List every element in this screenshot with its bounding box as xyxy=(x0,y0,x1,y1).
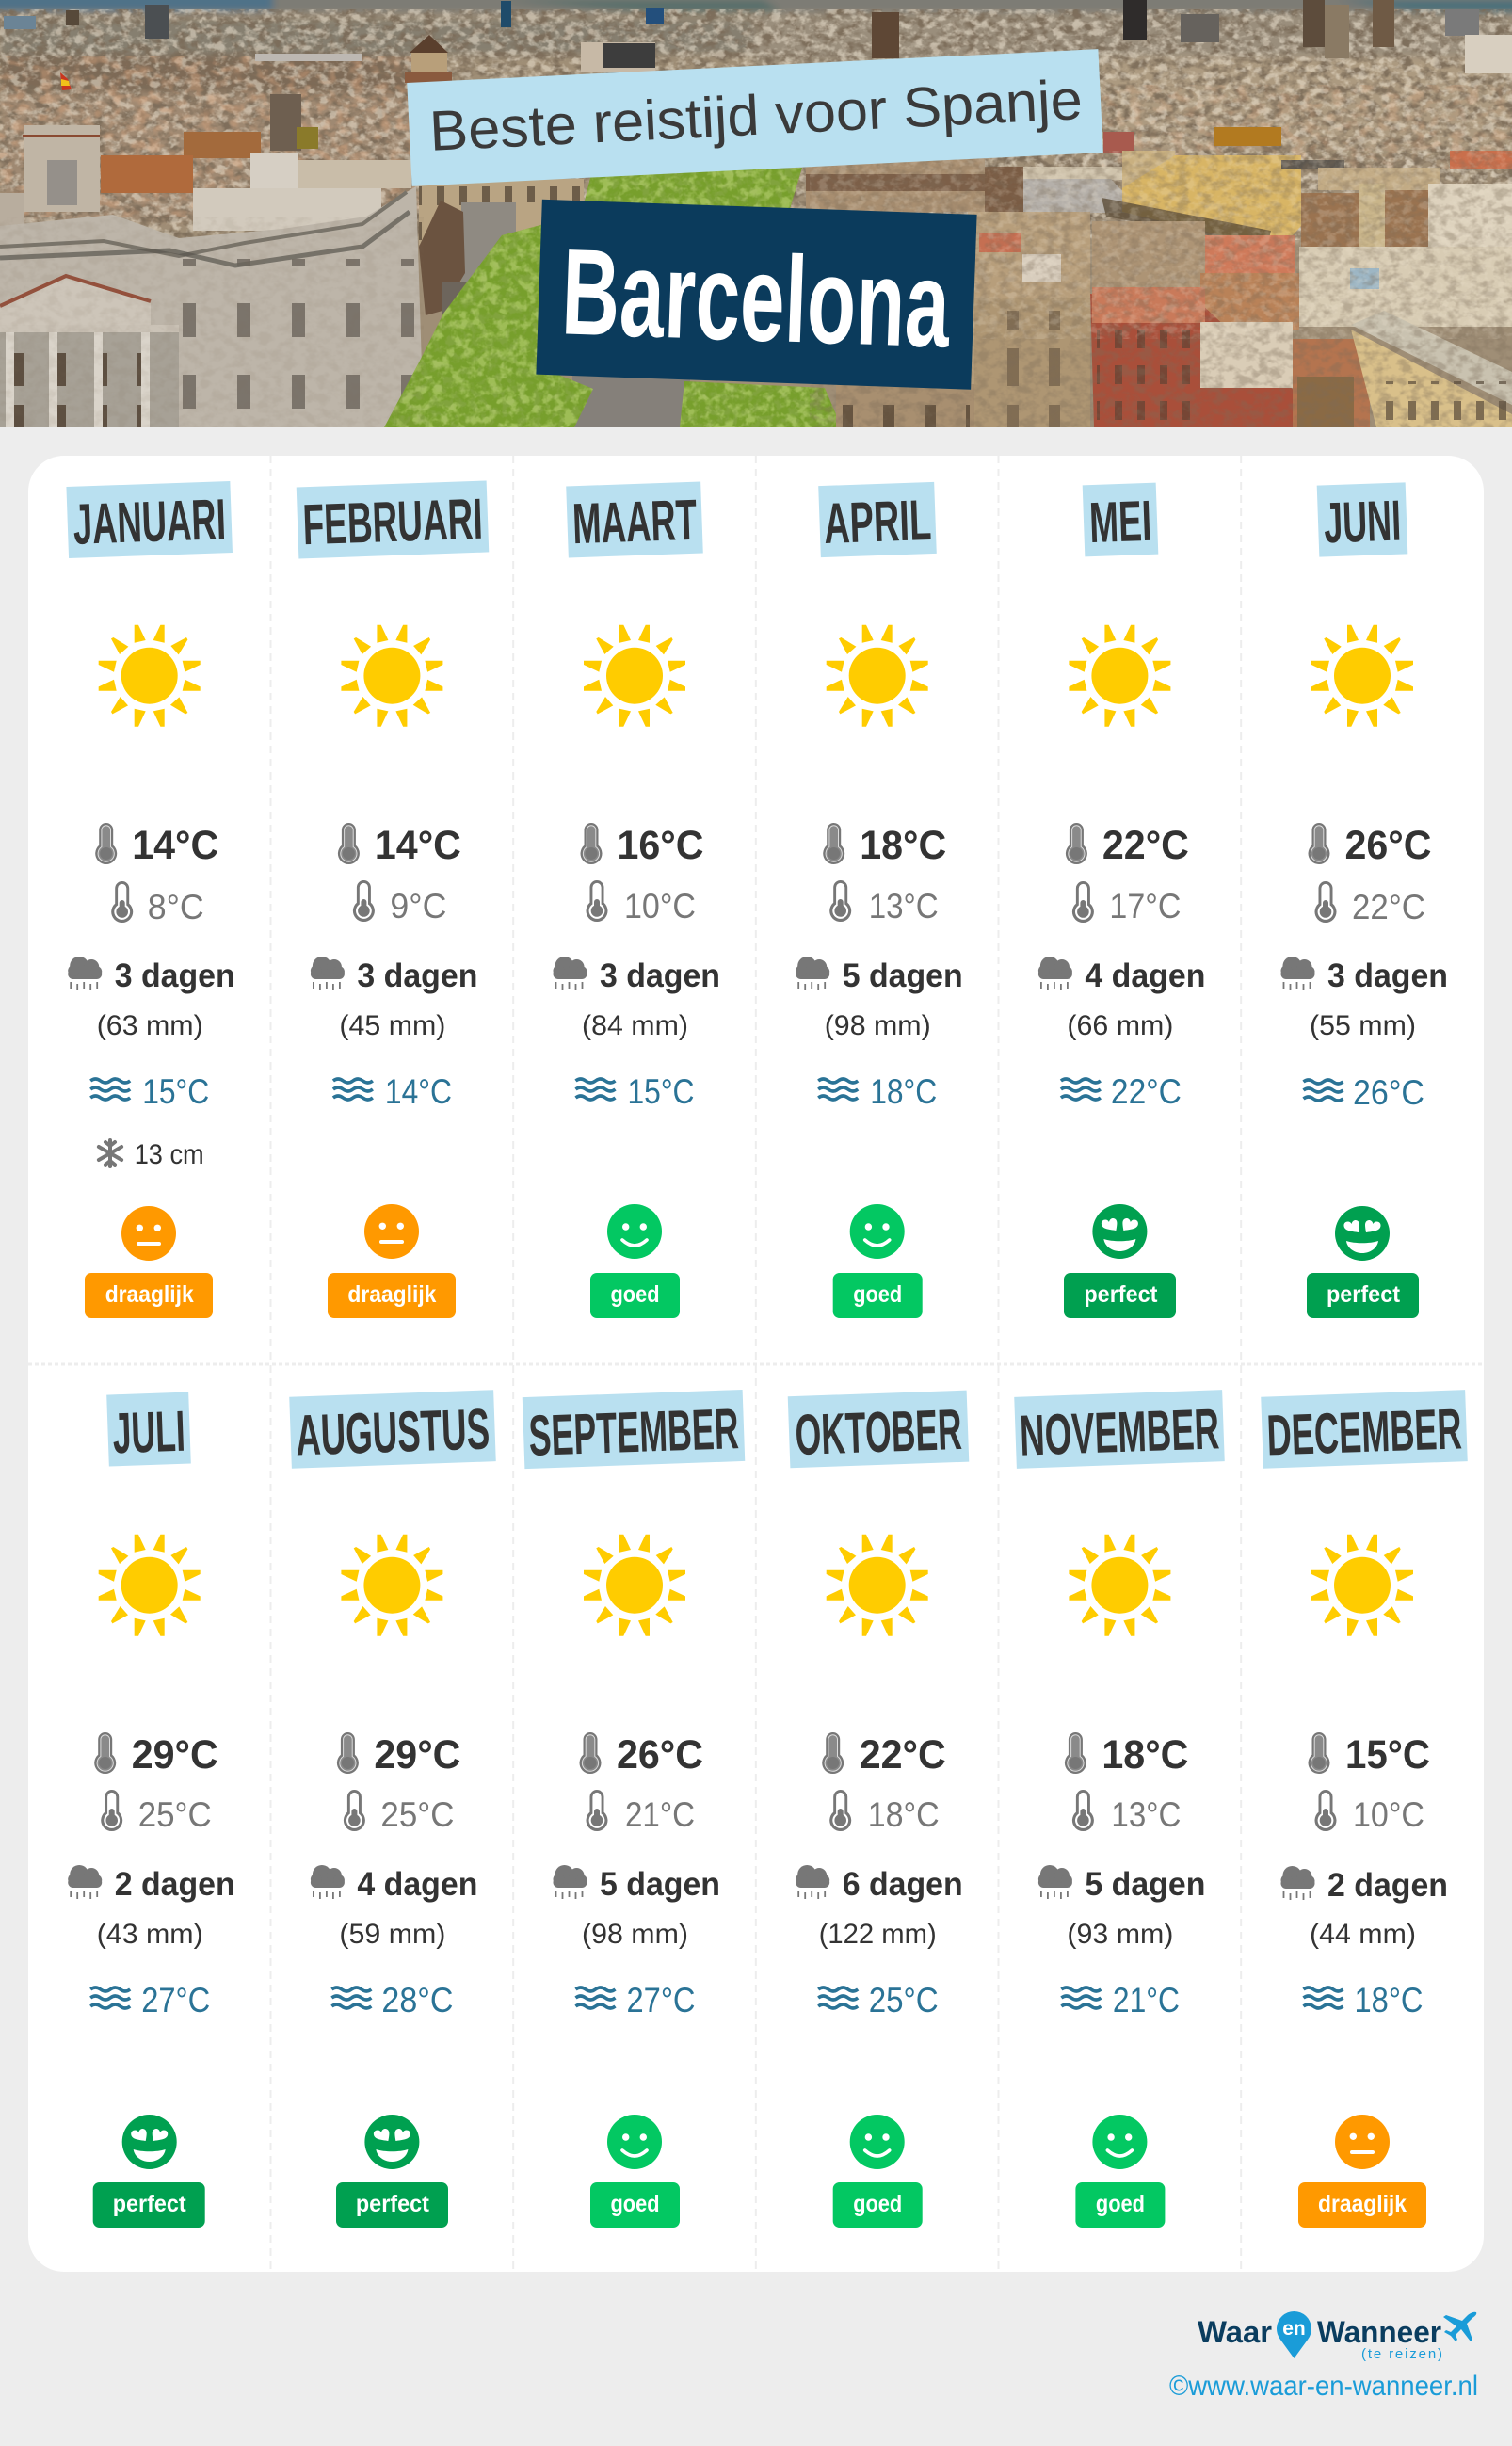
icon: sun xyxy=(1311,1535,1413,1636)
max temperature: 18°C xyxy=(860,823,946,868)
icon: sea water xyxy=(576,1079,616,1100)
rating face xyxy=(364,2115,419,2169)
rating badge: goed xyxy=(853,2191,902,2217)
icon: sun xyxy=(584,1535,685,1636)
rating face xyxy=(607,1204,662,1259)
rating face xyxy=(122,2115,177,2169)
rating face xyxy=(1335,1206,1390,1261)
rain days: 3 dagen xyxy=(357,957,477,994)
rating face xyxy=(1092,1204,1147,1259)
sea temperature: 22°C xyxy=(1111,1072,1182,1111)
rainfall: (44 mm) xyxy=(1310,1919,1416,1950)
icon: sun xyxy=(341,625,442,727)
rating face xyxy=(364,1204,419,1259)
rainfall: (55 mm) xyxy=(1310,1010,1416,1041)
rain days: 4 dagen xyxy=(357,1866,477,1903)
icon: max temperature xyxy=(580,1732,601,1774)
icon: min temperature xyxy=(586,1790,608,1831)
rating face xyxy=(850,1204,905,1259)
month: augustus xyxy=(289,1390,496,2228)
rainfall: (43 mm) xyxy=(97,1919,203,1950)
rain days: 4 dagen xyxy=(1085,957,1205,994)
max temperature: 22°C xyxy=(1102,823,1189,868)
month label: JUNI xyxy=(1323,489,1402,555)
month label: FEBRUARI xyxy=(301,487,484,556)
sea temperature: 26°C xyxy=(1353,1073,1424,1112)
icon: sun xyxy=(99,625,201,727)
rating badge: draaglijk xyxy=(105,1281,194,1308)
month: oktober xyxy=(788,1391,969,2228)
month: maart xyxy=(554,482,720,1318)
rating badge xyxy=(833,2182,923,2228)
max temperature: 18°C xyxy=(1102,1732,1188,1778)
rating badge: perfect xyxy=(113,2191,186,2217)
rating face xyxy=(607,2115,662,2169)
icon: sea water xyxy=(1303,1080,1343,1101)
rainfall: (66 mm) xyxy=(1067,1010,1173,1041)
rating badge: goed xyxy=(610,2191,659,2217)
rating badge xyxy=(1075,2182,1165,2228)
icon: sun xyxy=(584,625,685,727)
month label: NOVEMBER xyxy=(1019,1396,1220,1468)
max temperature: 15°C xyxy=(1345,1732,1430,1778)
min temperature: 13°C xyxy=(1111,1795,1181,1834)
left building xyxy=(0,125,424,427)
icon: sea water xyxy=(1061,1079,1101,1100)
max temperature: 26°C xyxy=(1344,823,1431,868)
icon: min temperature xyxy=(353,880,375,922)
rainfall: (59 mm) xyxy=(339,1919,445,1950)
rating face xyxy=(1335,2115,1390,2169)
icon: max temperature xyxy=(1309,823,1329,864)
sea temperature: 25°C xyxy=(869,1981,939,2020)
icon: rain xyxy=(1280,957,1314,990)
logo word: Wanneer: Wanneer xyxy=(1317,2315,1441,2349)
icon: map pin with en xyxy=(1277,2311,1311,2358)
icon: rain xyxy=(796,957,829,990)
month label: MEI xyxy=(1088,489,1152,555)
month label xyxy=(1083,483,1158,556)
icon: sea water xyxy=(90,1079,130,1100)
icon: rain xyxy=(554,957,587,990)
month label xyxy=(106,1392,191,1467)
icon: min temperature xyxy=(344,1790,365,1831)
rainfall: (45 mm) xyxy=(339,1010,445,1041)
max temperature: 29°C xyxy=(374,1732,460,1778)
max temperature: 29°C xyxy=(132,1732,218,1778)
min temperature: 25°C xyxy=(138,1795,212,1834)
month label xyxy=(818,482,937,557)
icon: sun xyxy=(1311,625,1413,727)
rating face xyxy=(121,1206,176,1261)
rating face xyxy=(850,2115,905,2169)
sea temperature: 14°C xyxy=(385,1072,452,1111)
logo: Waar en Wanneer xyxy=(1198,2311,1476,2362)
panel: climate calendar xyxy=(28,456,1484,2272)
rating badge: perfect xyxy=(356,2191,430,2217)
icon: rain xyxy=(1038,1865,1072,1899)
icon: min temperature xyxy=(829,1790,851,1831)
icon: airplane xyxy=(1443,2312,1476,2341)
min temperature: 17°C xyxy=(1109,887,1181,925)
rain days: 5 dagen xyxy=(843,957,963,994)
rating badge: goed xyxy=(610,1281,659,1308)
icon: rain xyxy=(311,957,345,990)
icon: min temperature xyxy=(101,1790,122,1831)
city banner: Barcelona xyxy=(536,200,977,390)
icon: sun xyxy=(827,1535,928,1636)
month label: AUGUSTUS xyxy=(295,1396,491,1468)
rain days: 5 dagen xyxy=(1085,1866,1205,1903)
icon: rain xyxy=(796,1865,829,1899)
icon: max temperature xyxy=(95,823,117,864)
month label xyxy=(289,1390,496,1469)
max temperature: 22°C xyxy=(860,1732,946,1778)
icon: max temperature xyxy=(338,823,360,864)
icon: min temperature xyxy=(111,881,133,923)
min temperature: 9°C xyxy=(390,887,446,925)
rating badge: goed xyxy=(853,1281,902,1308)
icon: sea water xyxy=(818,1079,858,1100)
rating badge xyxy=(328,1273,456,1318)
icon: min temperature xyxy=(1072,881,1094,923)
rating badge xyxy=(336,2182,448,2228)
icon: min temperature xyxy=(1314,881,1337,923)
rainfall: (98 mm) xyxy=(582,1919,688,1950)
icon: max temperature xyxy=(1065,1732,1086,1774)
min temperature: 13°C xyxy=(869,887,939,925)
icon: max temperature xyxy=(823,823,844,864)
icon: sun xyxy=(341,1535,442,1636)
icon: rain xyxy=(1280,1866,1314,1900)
rating badge xyxy=(93,2182,205,2228)
icon: sea water xyxy=(818,1987,858,2008)
month label xyxy=(566,482,703,557)
sea temperature: 28°C xyxy=(381,1981,453,2020)
month: juni xyxy=(1280,482,1448,1318)
month label xyxy=(66,481,233,558)
month label: JANUARI xyxy=(72,487,227,556)
icon: sun xyxy=(99,1535,201,1636)
icon: min temperature xyxy=(586,880,608,922)
icon: min temperature xyxy=(1314,1790,1337,1831)
icon: max temperature xyxy=(94,1732,116,1774)
sea temperature: 18°C xyxy=(1354,1981,1424,2020)
month: december xyxy=(1261,1390,1468,2228)
centre buildings xyxy=(419,179,690,427)
skyline towers and landmarks xyxy=(4,0,1512,151)
max temperature: 16°C xyxy=(618,823,704,868)
month label: APRIL xyxy=(823,488,932,555)
month label xyxy=(1014,1390,1225,1469)
month: januari xyxy=(66,481,235,1318)
min temperature: 18°C xyxy=(868,1795,940,1834)
icon: sea water xyxy=(90,1987,130,2008)
month: september xyxy=(523,1390,745,2228)
month: november xyxy=(1014,1390,1225,2228)
rating badge xyxy=(1307,1273,1419,1318)
icon: rain xyxy=(1038,957,1072,990)
min temperature: 22°C xyxy=(1352,888,1425,926)
icon: sun xyxy=(1069,1535,1170,1636)
snowfall: 13 cm xyxy=(135,1139,204,1170)
icon: rain xyxy=(68,957,102,990)
rain days: 5 dagen xyxy=(600,1866,720,1903)
month label: MAART xyxy=(571,488,698,555)
month: april xyxy=(796,482,963,1318)
rating badge xyxy=(590,1273,680,1318)
month label xyxy=(523,1390,745,1469)
month: februari xyxy=(297,480,489,1318)
rain days: 2 dagen xyxy=(1327,1867,1448,1904)
logo word: Waar: Waar xyxy=(1198,2315,1272,2349)
icon: min temperature xyxy=(829,880,851,922)
icon: sun xyxy=(1069,625,1170,727)
rating badge: draaglijk xyxy=(1318,2191,1407,2217)
month label: SEPTEMBER xyxy=(527,1396,740,1468)
icon: max temperature xyxy=(1066,823,1087,864)
sea temperature: 18°C xyxy=(870,1072,937,1111)
min temperature: 10°C xyxy=(624,887,696,925)
avenue trees xyxy=(384,168,836,427)
month label xyxy=(297,480,489,558)
max temperature: 14°C xyxy=(375,823,461,868)
icon: sea water xyxy=(1303,1987,1343,2008)
min temperature: 25°C xyxy=(380,1795,454,1834)
icon: sea water xyxy=(1061,1987,1101,2008)
rating badge: goed xyxy=(1096,2191,1145,2217)
sea temperature: 27°C xyxy=(627,1981,695,2020)
icon: sea water xyxy=(331,1987,371,2008)
month: mei xyxy=(1038,483,1205,1318)
rainfall: (122 mm) xyxy=(819,1919,937,1950)
logo tagline: (te reizen) xyxy=(1361,2346,1442,2362)
rating badge xyxy=(590,2182,680,2228)
sea temperature: 15°C xyxy=(627,1072,695,1111)
rating face xyxy=(1092,2115,1147,2169)
icon: max temperature xyxy=(580,823,603,864)
sea temperature: 21°C xyxy=(1113,1981,1180,2020)
rainfall: (93 mm) xyxy=(1067,1919,1173,1950)
month label: OKTOBER xyxy=(794,1397,963,1467)
city banner: Barcelona: Barcelona xyxy=(559,222,953,374)
rating badge: draaglijk xyxy=(347,1281,436,1308)
title banner: Beste reistijd voor Spanje: Beste reistijd voor Spanje xyxy=(428,68,1084,163)
rating badge: perfect xyxy=(1327,1281,1401,1308)
icon: max temperature xyxy=(1309,1732,1329,1774)
icon: rain xyxy=(311,1865,345,1899)
icon: map pin with en: en xyxy=(1282,2318,1306,2340)
website credit: ©www.waar-en-wanneer.nl xyxy=(1169,2371,1478,2402)
min temperature: 8°C xyxy=(148,888,204,926)
month label xyxy=(1317,482,1407,557)
min temperature: 21°C xyxy=(625,1795,695,1834)
rainfall: (84 mm) xyxy=(582,1010,688,1041)
month: juli xyxy=(68,1392,235,2228)
icon: rain xyxy=(554,1865,587,1899)
rain days: 3 dagen xyxy=(115,957,235,994)
rainfall: (63 mm) xyxy=(97,1010,203,1041)
icon: sun xyxy=(827,625,928,727)
rainfall: (98 mm) xyxy=(825,1010,931,1041)
icon: rain xyxy=(68,1865,102,1899)
rain days: 2 dagen xyxy=(115,1866,235,1903)
max temperature: 26°C xyxy=(617,1732,703,1778)
icon: snow xyxy=(99,1140,121,1167)
hero photo: Barcelona skyline xyxy=(0,0,1512,437)
rating badge xyxy=(1298,2182,1426,2228)
min temperature: 10°C xyxy=(1353,1795,1424,1834)
max temperature: 14°C xyxy=(132,823,218,868)
rating badge xyxy=(85,1273,213,1318)
sea temperature: 27°C xyxy=(141,1981,210,2020)
icon: sea water xyxy=(576,1987,616,2008)
icon: max temperature xyxy=(822,1732,844,1774)
month label xyxy=(788,1391,969,1468)
sea temperature: 15°C xyxy=(142,1072,209,1111)
rating badge xyxy=(1064,1273,1176,1318)
icon: max temperature xyxy=(337,1732,359,1774)
rain days: 6 dagen xyxy=(843,1866,963,1903)
rain days: 3 dagen xyxy=(1327,957,1448,994)
icon: min temperature xyxy=(1072,1790,1094,1831)
month label: JULI xyxy=(111,1399,186,1465)
title banner: Beste reistijd voor Spanje xyxy=(407,49,1103,186)
rating badge: perfect xyxy=(1084,1281,1158,1308)
rating badge xyxy=(833,1273,923,1318)
right buildings xyxy=(806,127,1512,427)
icon: sea water xyxy=(333,1079,373,1100)
rain days: 3 dagen xyxy=(600,957,720,994)
